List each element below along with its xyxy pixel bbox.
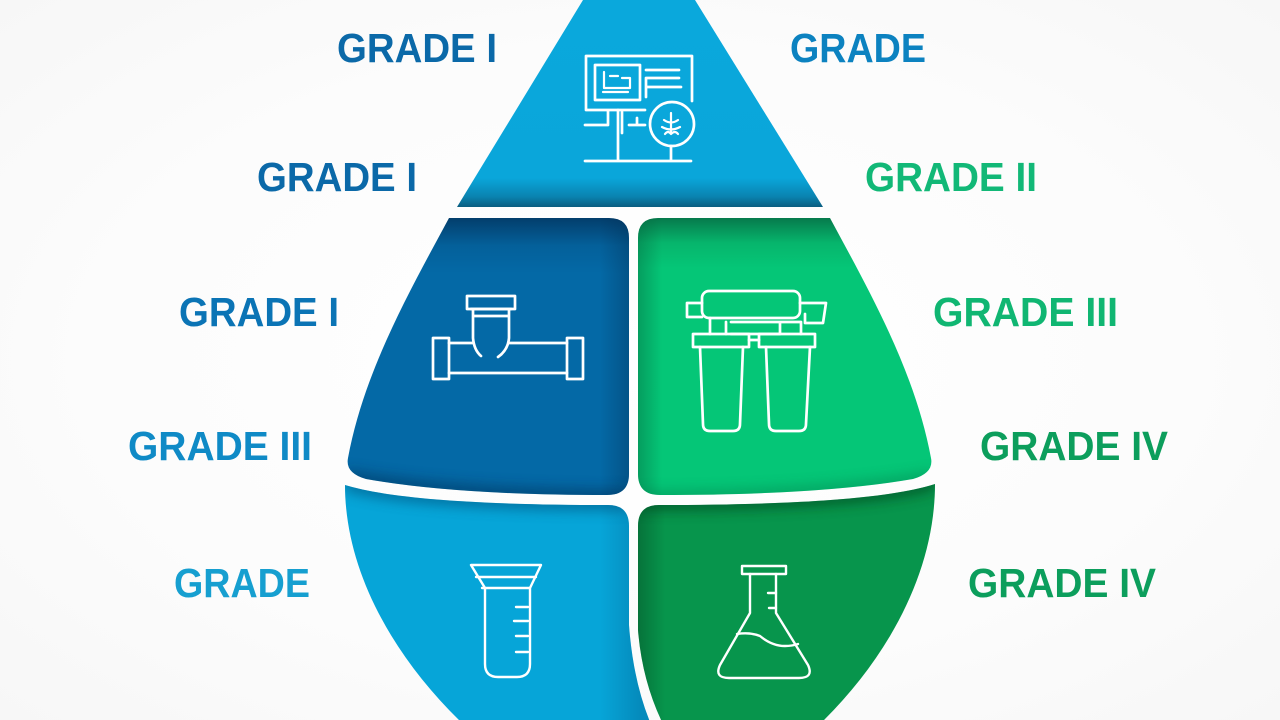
label: grade III left: GRADE III bbox=[128, 423, 312, 469]
label: grade top right: GRADE bbox=[790, 25, 926, 71]
label: grade bottom left: GRADE bbox=[174, 560, 310, 606]
label: grade III right: GRADE III bbox=[933, 289, 1118, 335]
label: grade I third left: GRADE I bbox=[179, 289, 339, 335]
icon: twin water filter bbox=[687, 291, 826, 431]
panel: bright green segment bbox=[638, 218, 935, 497]
icon: pipe tee fitting bbox=[433, 296, 583, 379]
label: grade IV lower right: GRADE IV bbox=[968, 560, 1157, 606]
panel: light blue segment bbox=[345, 483, 655, 720]
label: grade IV upper right: GRADE IV bbox=[980, 423, 1169, 469]
panel: dark green segment bbox=[638, 482, 935, 720]
icon: test tube bbox=[471, 565, 541, 677]
label: grade I top left: GRADE I bbox=[337, 25, 497, 71]
panel: top triangle segment bbox=[457, 0, 823, 207]
panel: dark blue segment bbox=[345, 218, 629, 497]
label: grade I second left: GRADE I bbox=[257, 154, 417, 200]
icon: monitor with control circle bbox=[585, 56, 694, 161]
label: grade II right: GRADE II bbox=[865, 154, 1037, 200]
icon: conical flask bbox=[718, 566, 810, 678]
